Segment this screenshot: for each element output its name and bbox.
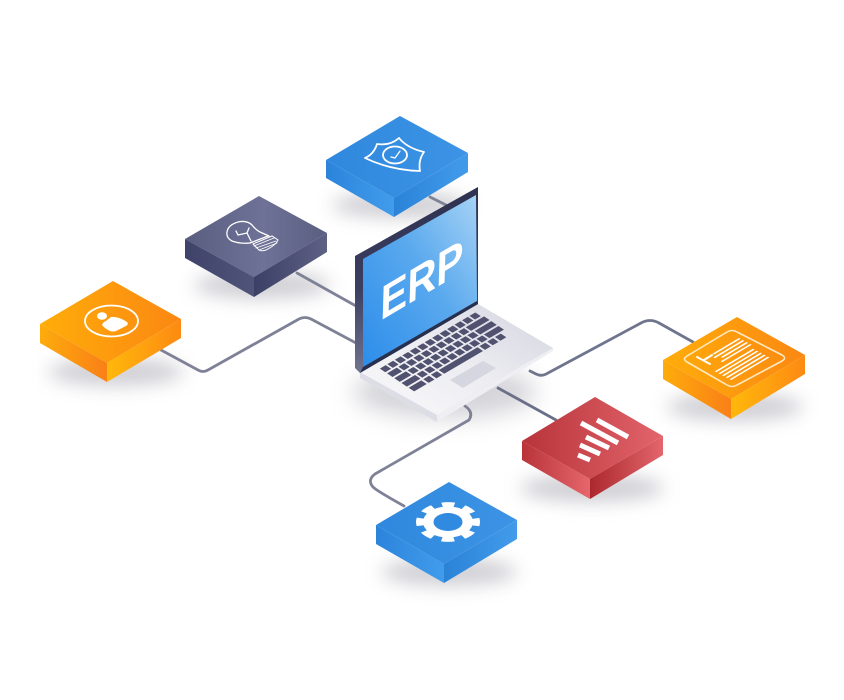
connector: bulb block to laptop (297, 273, 356, 306)
laptop (355, 187, 553, 422)
block faces (663, 317, 805, 419)
block: user (40, 281, 181, 382)
block: gear (376, 482, 517, 583)
touchpad (450, 361, 496, 388)
connector: chart block to laptop (498, 388, 556, 420)
laptop lid (355, 187, 478, 373)
connector: document block to laptop (530, 320, 693, 375)
block: light bulb (185, 196, 327, 297)
block: bar chart (522, 397, 663, 499)
screen text: ERP (380, 229, 464, 332)
icon: gear (420, 505, 476, 539)
icon: shield with check (365, 138, 424, 171)
icon: user in circle (85, 306, 138, 336)
connector: shield block to laptop (430, 197, 448, 206)
icon: document with text lines (684, 330, 784, 386)
connector: gear block to laptop (370, 406, 471, 506)
block faces (185, 196, 327, 297)
block faces (326, 116, 468, 217)
block: document (663, 317, 805, 419)
block faces (40, 281, 181, 382)
block faces (376, 482, 517, 583)
connector: user block to laptop (161, 318, 356, 372)
keyboard (383, 313, 508, 390)
block faces (522, 397, 663, 499)
laptop base (360, 304, 553, 422)
block: shield (326, 116, 468, 217)
icon: descending bars (578, 420, 628, 460)
connector lines (161, 197, 693, 506)
icon: light bulb (227, 221, 278, 251)
floor shadows (48, 192, 803, 586)
